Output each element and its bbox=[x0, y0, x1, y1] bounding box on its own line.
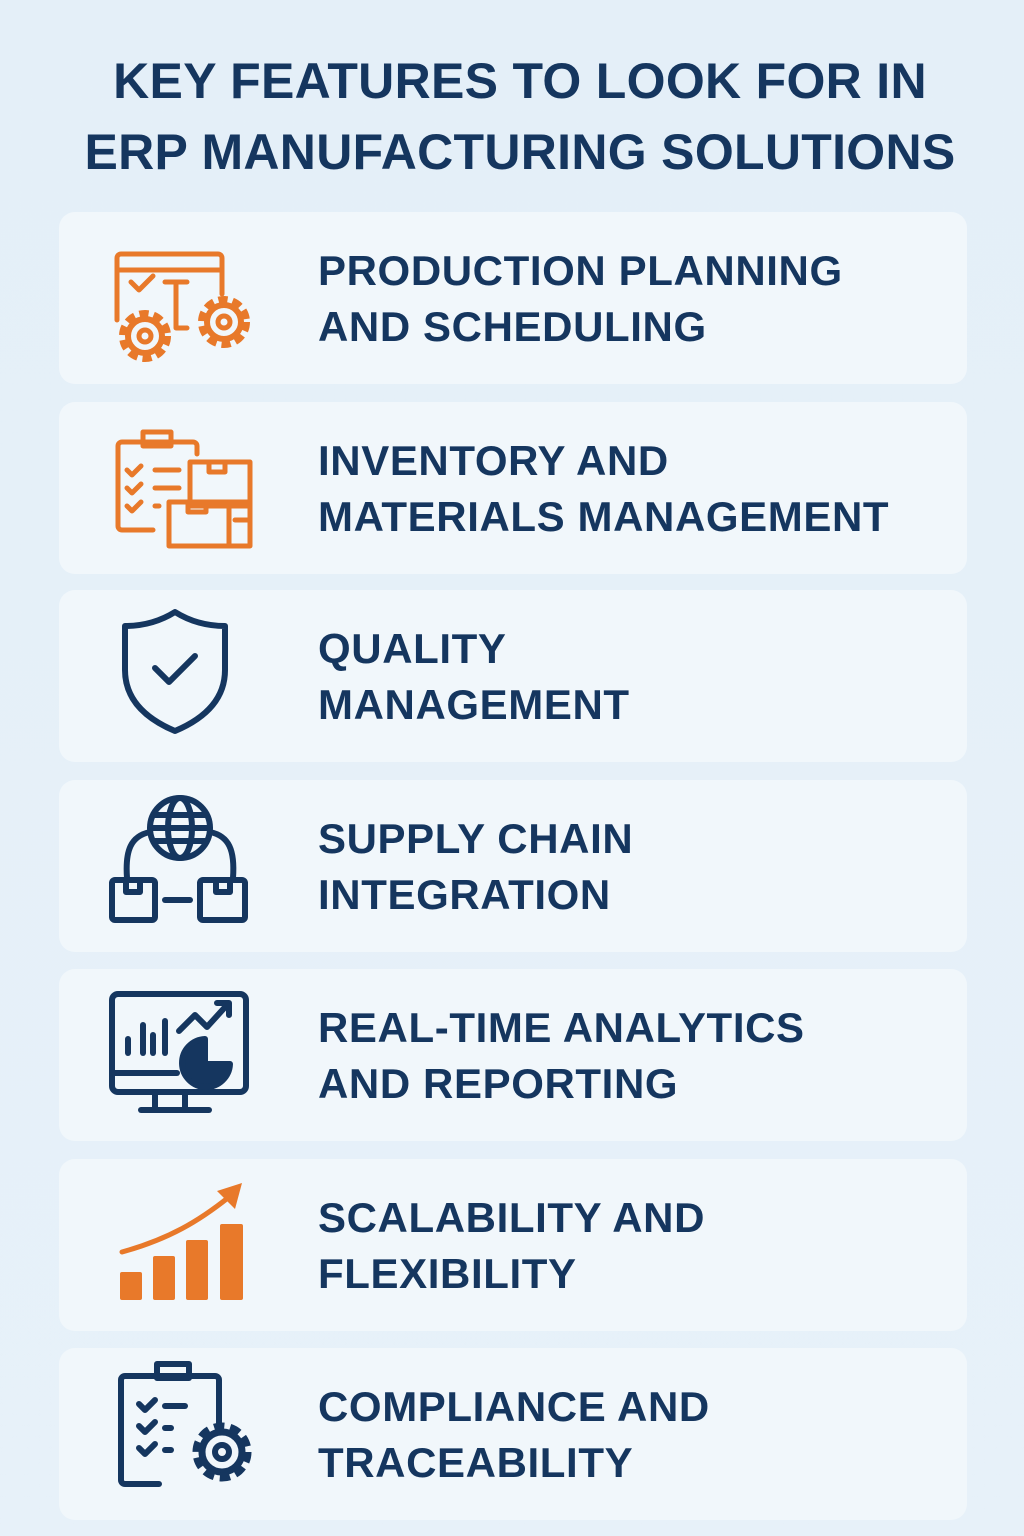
text: QUALITY bbox=[318, 625, 507, 672]
icon: clipboard gear bbox=[118, 1361, 252, 1487]
text: AND SCHEDULING bbox=[318, 303, 707, 350]
text: MATERIALS MANAGEMENT bbox=[318, 493, 889, 540]
text: INTEGRATION bbox=[318, 871, 611, 918]
text: MANAGEMENT bbox=[318, 681, 630, 728]
text bbox=[318, 1383, 710, 1486]
title bbox=[84, 53, 956, 180]
panel: inventory bbox=[59, 402, 967, 574]
text: INVENTORY AND bbox=[318, 437, 669, 484]
text: SUPPLY CHAIN bbox=[318, 815, 633, 862]
text: COMPLIANCE AND bbox=[318, 1383, 710, 1430]
title: KEY FEATURES TO LOOK FOR IN bbox=[113, 53, 927, 109]
icon: shield check bbox=[122, 609, 228, 734]
text bbox=[318, 1004, 805, 1107]
panel: scalability bbox=[59, 1159, 967, 1331]
icon: globe boxes bbox=[109, 795, 248, 923]
icon: clipboard boxes bbox=[116, 430, 252, 548]
text bbox=[318, 625, 630, 728]
text bbox=[318, 1194, 705, 1297]
icon: growth bars bbox=[120, 1183, 243, 1300]
panel: analytics bbox=[59, 969, 967, 1141]
text bbox=[318, 437, 889, 540]
text: REAL-TIME ANALYTICS bbox=[318, 1004, 805, 1051]
text: PRODUCTION PLANNING bbox=[318, 247, 843, 294]
text bbox=[318, 815, 633, 918]
text: TRACEABILITY bbox=[318, 1439, 633, 1486]
text bbox=[318, 247, 843, 350]
panel: supply chain bbox=[59, 780, 967, 952]
text: SCALABILITY AND bbox=[318, 1194, 705, 1241]
panel: quality bbox=[59, 590, 967, 762]
icon: monitor chart bbox=[109, 991, 249, 1113]
text: FLEXIBILITY bbox=[318, 1250, 577, 1297]
panel: compliance bbox=[59, 1348, 967, 1520]
panel: production planning bbox=[59, 212, 967, 384]
icon: schedule gears bbox=[114, 252, 250, 362]
text: AND REPORTING bbox=[318, 1060, 678, 1107]
title: ERP MANUFACTURING SOLUTIONS bbox=[84, 124, 956, 180]
